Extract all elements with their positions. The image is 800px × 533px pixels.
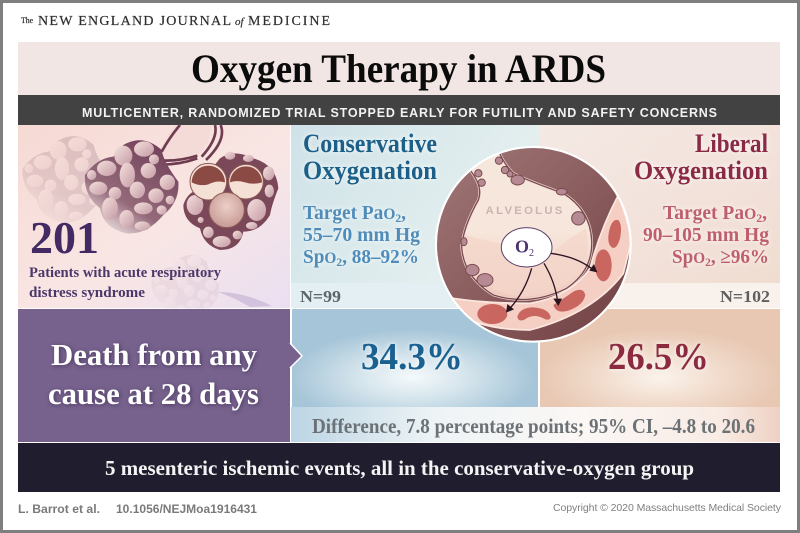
conservative targets: , [401,202,406,224]
liberal targets: , [762,202,767,224]
conservative targets: 2 [395,211,401,225]
citation [18,502,257,516]
title band: Oxygen Therapy in ARDS [191,46,606,91]
second cluster [183,153,278,250]
journal masthead: MEDICINE [248,14,330,29]
illustration: alveolus [430,146,637,343]
journal masthead: The [21,15,33,25]
title band [18,42,780,96]
liberal heading: Oxygenation [634,156,768,185]
liberal targets: 90–105 mm Hg [643,224,769,246]
oxygen arrows [506,253,597,313]
oxygen bubble [501,228,552,267]
alveolus label: ALVEOLUS [486,205,563,217]
key safety finding bar [18,443,780,492]
conservative heading: Conservative [303,129,437,158]
patient description [29,265,222,301]
panel: liberal result [540,309,780,407]
red blood cells [477,220,621,324]
citation: L. Barrot et al. [18,502,100,516]
outcome text: Death from any [51,338,257,372]
key safety finding bar: 5 mesenteric ischemic events, all in the conservative-oxygen group [105,456,694,480]
panel: outcome label [18,309,290,442]
liberal targets: SpO [672,246,706,268]
alveolar sac [462,150,592,300]
icon: faded alveoli cluster, lower [151,255,219,322]
subtitle bar [18,95,780,125]
liberal targets: Target PaO [663,202,757,224]
difference strip [291,407,780,442]
panel: liberal oxygenation [540,125,780,308]
liberal targets: 2 [705,255,711,269]
conservative heading [303,129,437,185]
outcome panel pointer [289,343,302,368]
oxygen bubble: 2 [529,248,534,259]
oxygen bubble: O [515,237,529,257]
conservative targets: , 88–92% [342,246,419,268]
panel: liberal result: 26.5% [608,336,709,378]
capillary [443,195,632,330]
panel: patients [18,125,290,322]
outcome text: cause at 28 days [48,377,259,411]
conservative targets [303,202,420,269]
conservative targets: SpO [303,246,337,268]
panel: conservative oxygenation [291,125,540,308]
icon: cut alveolar spheres [190,163,263,228]
liberal heading: Liberal [695,129,768,158]
liberal targets: , ≥96% [711,246,769,268]
citation: 10.1056/NEJMoa1916431 [116,502,257,516]
conservative heading: Oxygenation [303,156,437,185]
journal masthead: NEW ENGLAND JOURNAL [38,14,231,29]
fluid lining [465,228,588,297]
conservative targets: 55–70 mm Hg [303,224,420,246]
conservative targets: 2 [336,255,342,269]
patient description: distress syndrome [29,285,146,301]
wall cells [461,157,585,286]
liberal targets [643,202,769,269]
icon: faded bronchiole ribbon [218,292,272,307]
icon: faded alveoli cluster, upper left [23,136,110,223]
journal masthead: of [235,16,246,28]
subtitle bar: MULTICENTER, RANDOMIZED TRIAL STOPPED EARLY FOR FUTILITY AND SAFETY CONCERNS [82,106,717,120]
liberal heading [634,129,768,185]
outcome text [48,338,259,411]
conservative N: N=99 [300,287,341,306]
patient count: 201 [30,212,99,263]
patient description: Patients with acute respiratory [29,265,222,281]
difference strip: Difference, 7.8 percentage points; 95% CI, –4.8 to 20.6 [312,414,755,438]
icon: alveoli clusters [85,125,278,250]
liberal targets: 2 [756,211,762,225]
panel: conservative result: 34.3% [361,336,463,378]
conservative targets: Target PaO [303,202,396,224]
copyright: Copyright © 2020 Massachusetts Medical Society [553,502,782,514]
liberal N: N=102 [720,287,770,306]
panel: conservative result [292,309,538,407]
journal masthead [21,14,330,29]
